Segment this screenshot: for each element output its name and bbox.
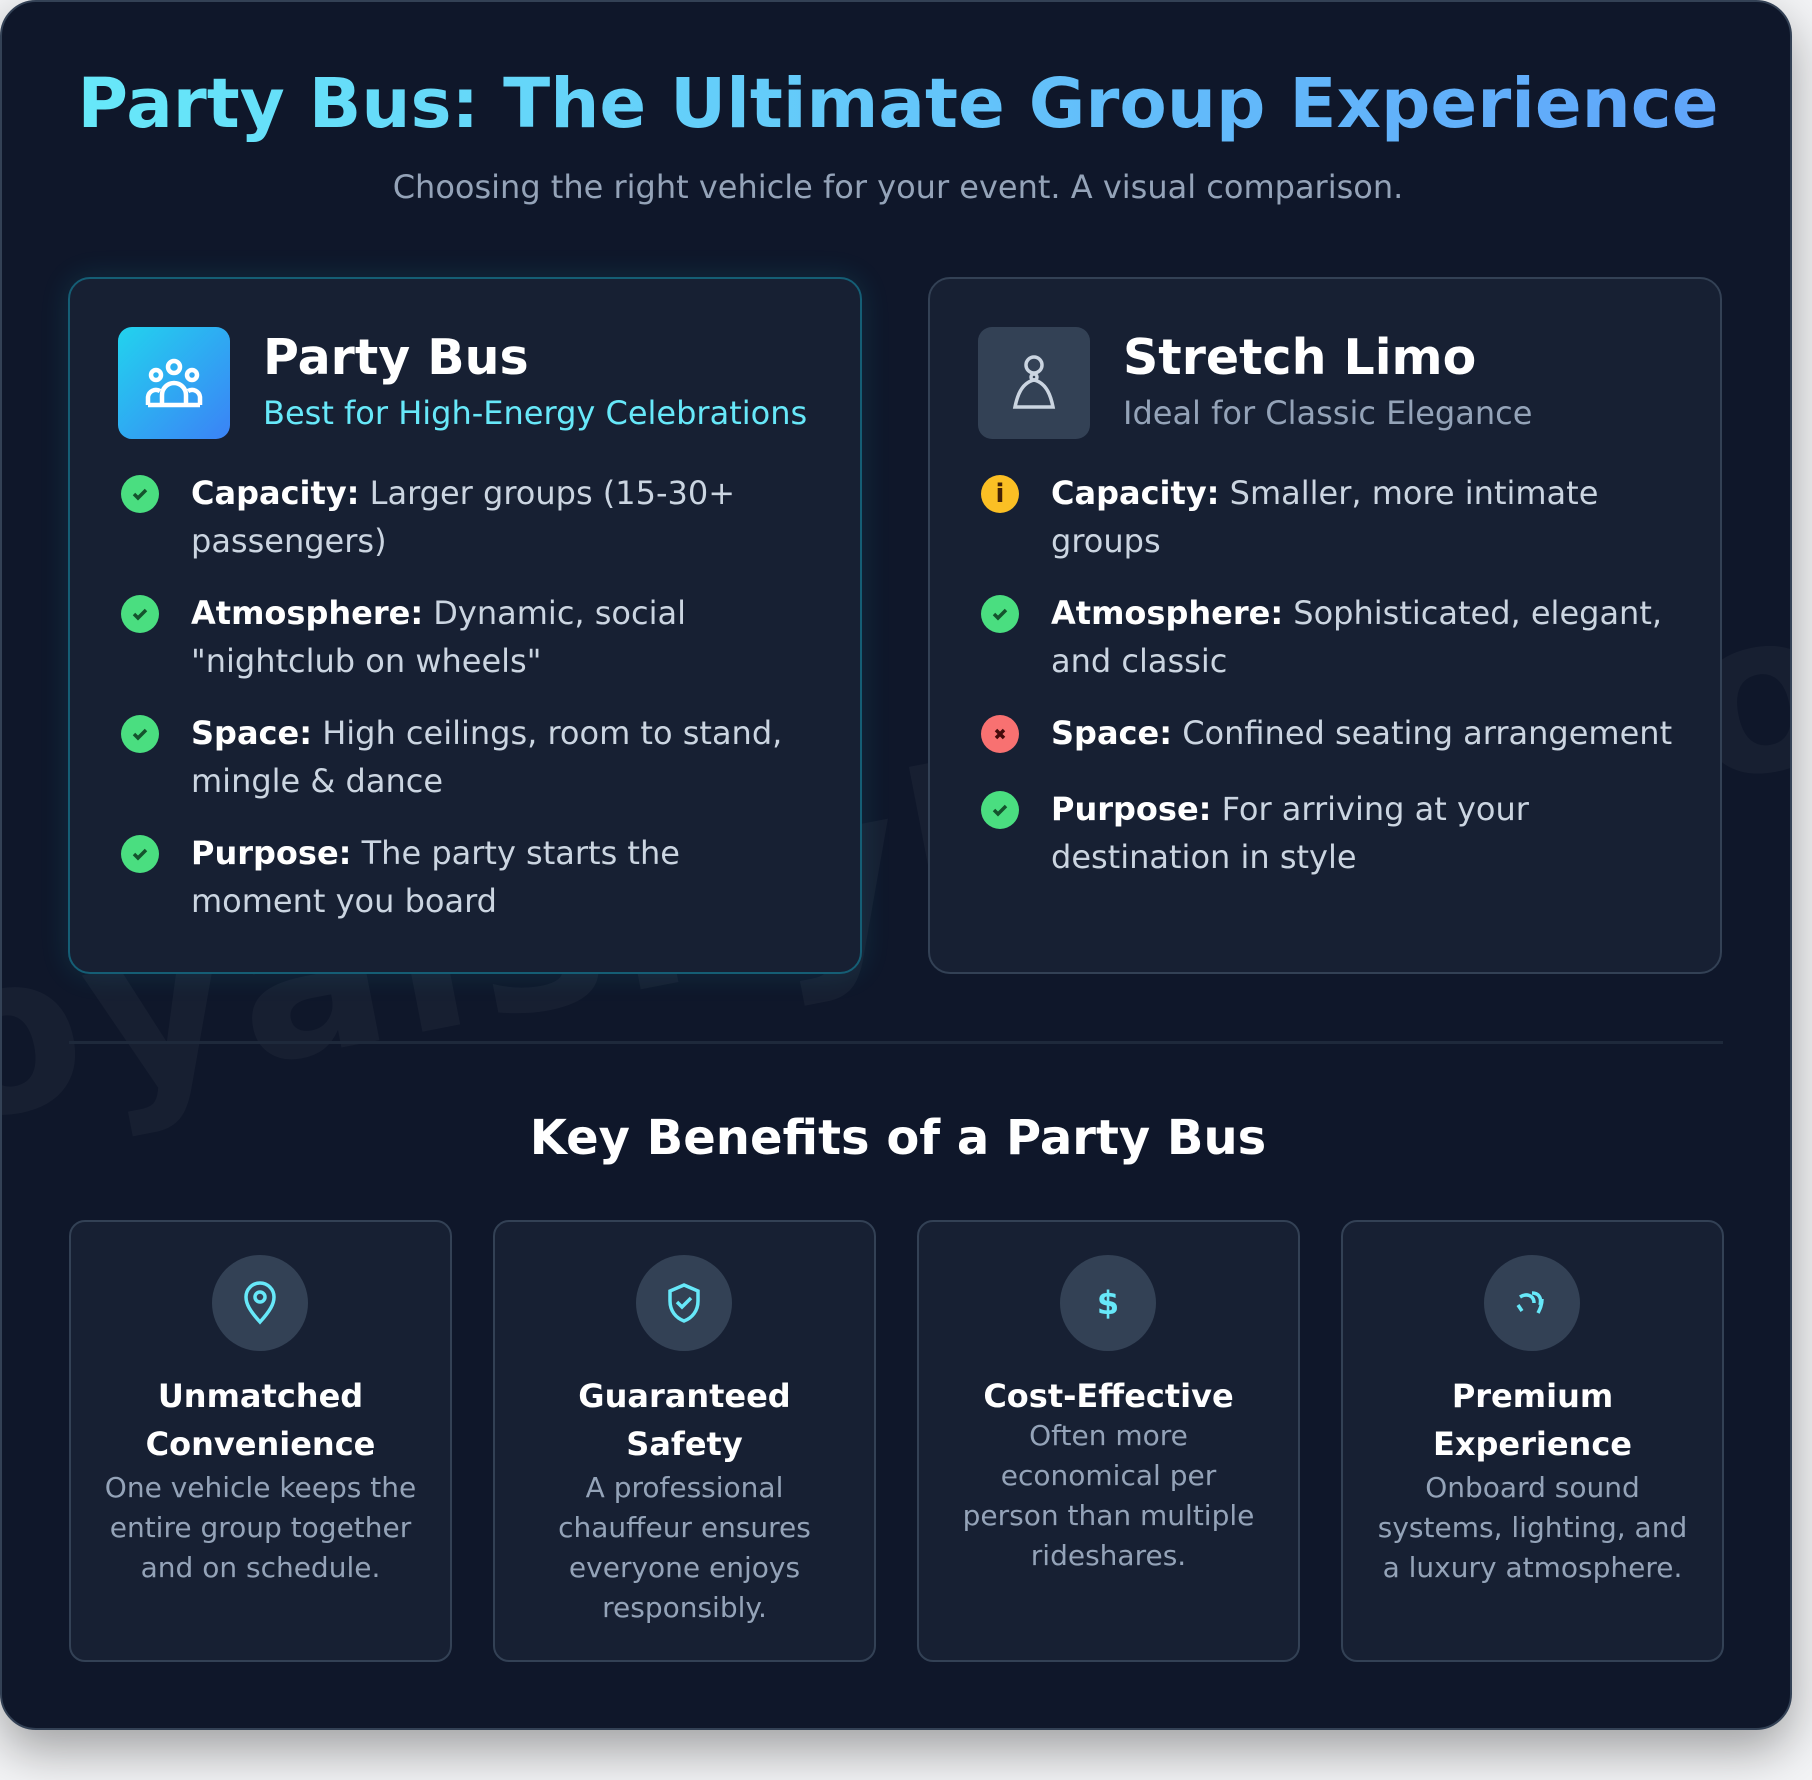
benefit: safety: Guaranteed bbox=[578, 1377, 791, 1415]
heading: Party Bus bbox=[263, 329, 529, 386]
icon: group bbox=[118, 327, 230, 439]
icon: person bbox=[978, 327, 1090, 439]
benefit: premium: Premium bbox=[1452, 1377, 1613, 1415]
benefit: cost bbox=[917, 1220, 1300, 1662]
benefit: safety: A professional chauffeur ensures everyone enjoys responsibly. bbox=[558, 1471, 811, 1624]
panel: stretch limo bbox=[928, 277, 1722, 974]
subtitle: Choosing the right vehicle for your event. A visual comparison. bbox=[393, 168, 1403, 206]
heading: key benefits: Key Benefits of a Party Bus bbox=[530, 1110, 1266, 1166]
icon: sound bbox=[1484, 1255, 1580, 1351]
icon: dollar bbox=[1060, 1255, 1156, 1351]
benefit: convenience: Unmatched bbox=[158, 1377, 363, 1415]
item: space: Space: Confined seating arrangement bbox=[1051, 714, 1672, 752]
item: atmosphere: Atmosphere: Sophisticated, elegant, and classic bbox=[1051, 594, 1662, 680]
benefit: cost: Often more economical per person than multiple rideshares. bbox=[963, 1419, 1254, 1572]
item: purpose: Purpose: For arriving at your destination in style bbox=[1051, 790, 1529, 876]
item: capacity: Capacity: Smaller, more intimate groups bbox=[1051, 474, 1598, 560]
item: purpose: Purpose: The party starts the moment you board bbox=[191, 834, 680, 920]
icon: location pin bbox=[212, 1255, 308, 1351]
benefit: premium: Onboard sound systems, lighting, and a luxury atmosphere. bbox=[1378, 1471, 1687, 1584]
tagline: Best for High-Energy Celebrations bbox=[263, 394, 807, 432]
item: space: Space: High ceilings, room to stand, mingle & dance bbox=[191, 714, 782, 800]
tagline: Ideal for Classic Elegance bbox=[1123, 394, 1532, 432]
item: atmosphere: Atmosphere: Dynamic, social "nightclub on wheels" bbox=[191, 594, 686, 680]
benefit: convenience: Convenience bbox=[146, 1425, 375, 1463]
item: capacity: Capacity: Larger groups (15-30+ passengers) bbox=[191, 474, 735, 560]
benefit: convenience: One vehicle keeps the entire group together and on schedule. bbox=[105, 1471, 416, 1584]
benefit: safety: Safety bbox=[626, 1425, 743, 1463]
benefit: convenience bbox=[69, 1220, 452, 1662]
benefit: safety bbox=[493, 1220, 876, 1662]
benefit: premium: Experience bbox=[1433, 1425, 1632, 1463]
title: Party Bus: The Ultimate Group Experience bbox=[77, 64, 1718, 144]
icon: shield bbox=[636, 1255, 732, 1351]
benefit: cost: Cost-Effective bbox=[983, 1377, 1234, 1415]
panel: stretch limo: i bbox=[996, 479, 1004, 509]
heading: Stretch Limo bbox=[1123, 329, 1476, 386]
icon: dollar: $ bbox=[1097, 1284, 1119, 1322]
panel: party bus bbox=[68, 277, 862, 974]
benefit: premium bbox=[1341, 1220, 1724, 1662]
